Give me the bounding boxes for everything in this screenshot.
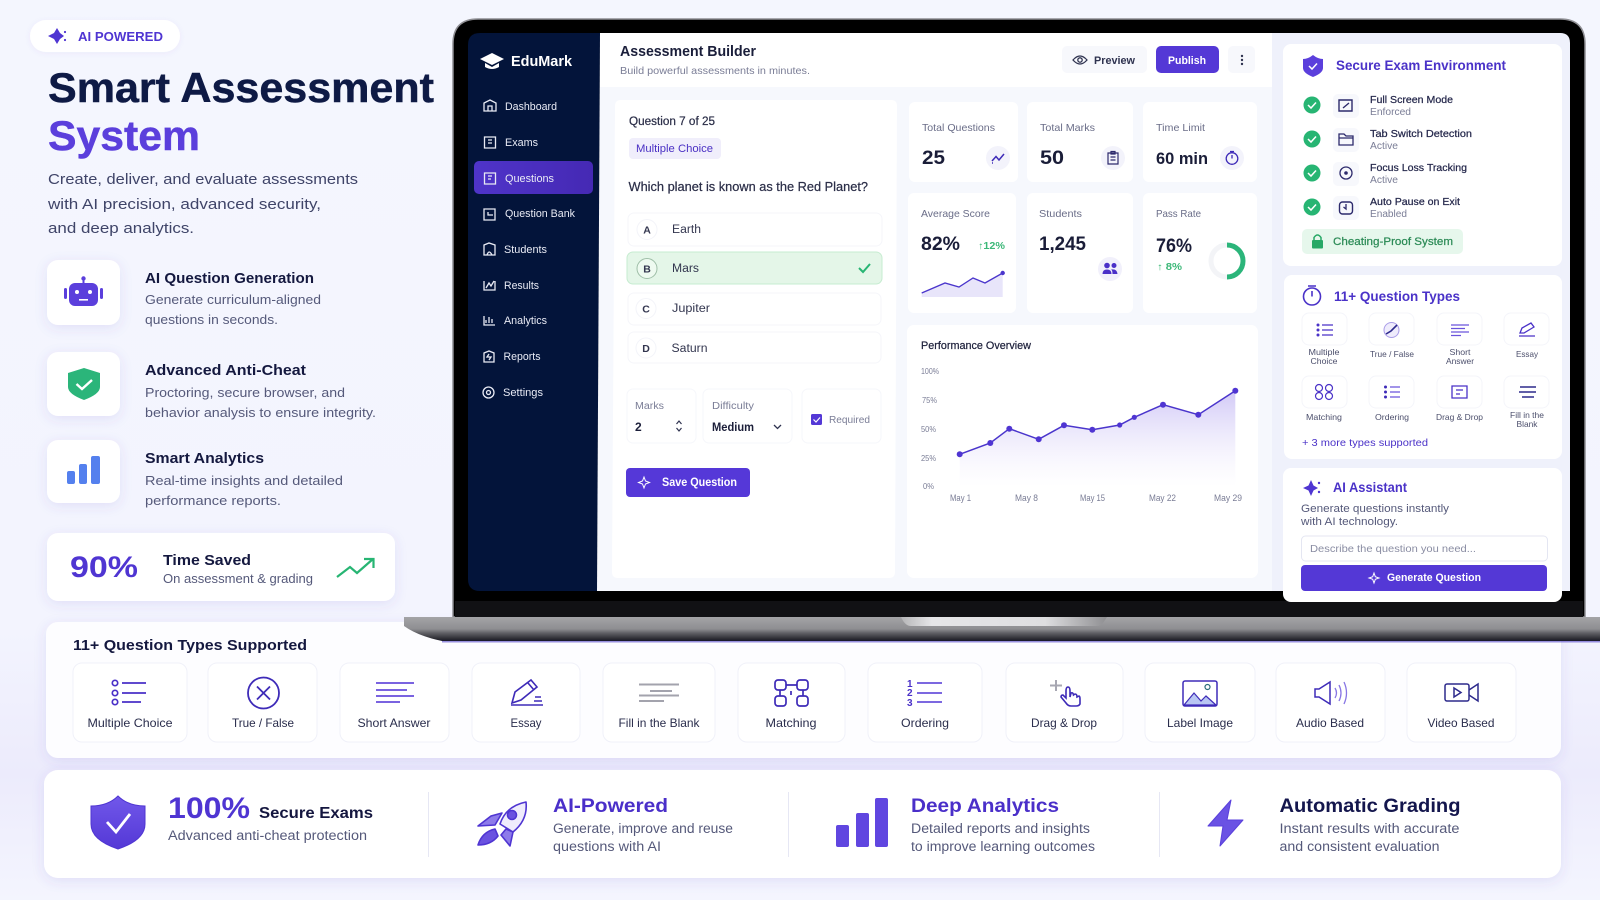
panel: AI assistant: with AI technology. xyxy=(1300,516,1398,528)
feature: AI question generation: questions in seconds. xyxy=(145,312,278,327)
icon: blue bars xyxy=(67,456,100,484)
stat card: total questions: 25 xyxy=(922,148,945,169)
panel: performance overview chart: Performance Overview xyxy=(921,340,1031,352)
stat card: total marks xyxy=(1027,102,1133,182)
tile: label image xyxy=(1145,663,1255,742)
stat: secure exams: Secure Exams xyxy=(259,805,373,822)
nav icon: results xyxy=(484,281,495,290)
nav icon: reports xyxy=(484,351,494,362)
stat card: time saved: Time Saved xyxy=(163,552,251,569)
labels row 1: Choice xyxy=(1310,356,1338,366)
nav icon: students xyxy=(484,243,495,255)
stat card: time limit: Time Limit xyxy=(1156,122,1205,134)
panel: secure exam environment: Secure Exam Environment xyxy=(1336,58,1506,73)
x axis labels: May 22 xyxy=(1149,493,1176,503)
panel: performance overview chart xyxy=(907,325,1258,578)
tag: multiple choice: Multiple Choice xyxy=(636,143,713,155)
feature: advanced anti-cheat: Advanced Anti-Cheat xyxy=(145,362,306,379)
tile: audio based xyxy=(1276,663,1385,742)
row: auto pause on exit: Auto Pause on Exit xyxy=(1370,197,1460,208)
stat: secure exams: Advanced anti-cheat protection xyxy=(168,828,367,843)
intro paragraph: Create, deliver, and evaluate assessments xyxy=(48,171,358,188)
stat card: time saved: 90% xyxy=(70,551,138,584)
stat card: average score xyxy=(908,193,1016,313)
nav: labels: Results xyxy=(504,280,539,292)
field: difficulty xyxy=(703,389,792,443)
tile: matching: Matching xyxy=(766,716,816,730)
panel: question types supported: 11+ Question Types Supported xyxy=(73,637,307,654)
icon: sparkle xyxy=(48,28,66,44)
panel: AI assistant: AI Assistant xyxy=(1333,480,1407,495)
labels row 2: Ordering xyxy=(1375,412,1409,422)
field: marks xyxy=(627,389,696,443)
row: full screen mode: Full Screen Mode xyxy=(1370,95,1453,106)
panel: bottom highlights xyxy=(44,770,1561,878)
option D: D xyxy=(642,343,650,355)
option A: A xyxy=(643,224,651,236)
icon: trend arrow xyxy=(337,559,374,577)
button: preview: Preview xyxy=(1094,55,1135,67)
tile: fill in the blank xyxy=(603,663,715,742)
feature: smart analytics: Real-time insights and detailed xyxy=(145,473,343,488)
labels row 1 xyxy=(1308,347,1539,366)
app: header bar xyxy=(600,33,1272,87)
stat: secure exams xyxy=(168,792,373,843)
panel: question card: Which planet is known as the Red Planet? xyxy=(628,180,868,194)
labels row 1: True / False xyxy=(1370,349,1414,359)
icon: large shield xyxy=(91,796,145,849)
panel: AI assistant xyxy=(1283,468,1562,602)
tile: true false xyxy=(208,663,317,742)
row: focus loss tracking: Active xyxy=(1370,175,1398,186)
tile: drag and drop xyxy=(1006,663,1123,742)
feature: AI question generation: Generate curriculum-aligned xyxy=(145,292,321,307)
stat card: students: 1,245 xyxy=(1039,234,1086,255)
input: question prompt: Describe the question you need... xyxy=(1310,543,1476,555)
x axis labels: May 29 xyxy=(1214,493,1242,503)
tile: ordering: 2 xyxy=(907,688,913,699)
field: difficulty: Difficulty xyxy=(712,401,754,412)
y axis labels: 100% xyxy=(921,367,939,376)
intro paragraph: and deep analytics. xyxy=(48,220,194,237)
labels row 2: Fill in the xyxy=(1510,410,1544,420)
tile: video based xyxy=(1407,663,1516,742)
app: right column background xyxy=(1272,33,1570,591)
nav icon: settings xyxy=(483,387,494,398)
block: automatic grading xyxy=(1280,796,1460,854)
tile: video based: Video Based xyxy=(1428,716,1494,730)
option D xyxy=(628,332,881,363)
stat card: pass rate: Pass Rate xyxy=(1156,208,1201,220)
app: main content background xyxy=(597,33,1272,591)
nav: labels: Exams xyxy=(505,137,538,149)
feature: AI question generation: AI Question Generation xyxy=(145,270,314,287)
feature: smart analytics: Smart Analytics xyxy=(145,450,264,467)
icon: robot xyxy=(64,276,103,306)
stat card: students: Students xyxy=(1039,208,1082,220)
y axis labels: 75% xyxy=(922,396,937,405)
option C: C xyxy=(642,304,650,316)
nav icon: questions xyxy=(484,173,496,184)
tile: audio based: Audio Based xyxy=(1296,716,1364,730)
stat: secure exams: 100% xyxy=(168,792,250,825)
block: AI-powered: AI-Powered xyxy=(553,796,668,817)
labels row 2: Matching xyxy=(1306,412,1342,422)
icon: lightning bolt xyxy=(1208,800,1243,846)
area and line xyxy=(957,388,1238,487)
row: tab switch detection xyxy=(1304,128,1472,152)
stat card: total marks: Total Marks xyxy=(1040,122,1095,134)
feature: advanced anti-cheat: Proctoring, secure browser, and xyxy=(145,385,345,400)
option A xyxy=(628,213,882,246)
button: save question xyxy=(626,468,750,497)
button: publish: Publish xyxy=(1168,55,1206,67)
badge: cheating-proof system xyxy=(1302,229,1463,254)
badge: AI powered: AI POWERED xyxy=(78,29,163,44)
option B correct xyxy=(627,252,882,284)
nav: labels: Analytics xyxy=(504,315,547,327)
tile: short answer xyxy=(340,663,449,742)
button: more xyxy=(1228,46,1255,73)
stat card: time saved: On assessment & grading xyxy=(163,571,313,586)
nav icon: analytics xyxy=(484,316,495,325)
field: required: Required xyxy=(829,415,870,426)
nav: labels: Question Bank xyxy=(505,208,575,220)
stat card: total questions xyxy=(909,102,1018,182)
tile: multiple choice: Multiple Choice xyxy=(88,716,173,730)
block: deep analytics: Detailed reports and insights xyxy=(911,821,1090,836)
button: generate question xyxy=(1301,565,1547,591)
nav: labels: Questions xyxy=(505,173,554,185)
stat card: time limit: 60 min xyxy=(1156,149,1208,168)
nav icon: question bank xyxy=(484,209,495,220)
laptop base xyxy=(404,617,1600,641)
field: difficulty: Medium xyxy=(712,420,754,434)
option D: Saturn xyxy=(672,343,708,355)
field: marks: 2 xyxy=(635,420,642,434)
row: full screen mode: Enforced xyxy=(1370,107,1411,118)
tile: short answer: Short Answer xyxy=(358,716,430,730)
labels row 2: Drag & Drop xyxy=(1436,412,1483,422)
tile: drag and drop: Drag & Drop xyxy=(1031,716,1097,730)
row: focus loss tracking: Focus Loss Tracking xyxy=(1370,163,1467,174)
button: generate question: Generate Question xyxy=(1387,572,1481,584)
donut gauge xyxy=(1211,245,1243,277)
panel: question card xyxy=(612,100,897,578)
stat card: total marks: 50 xyxy=(1040,148,1064,169)
tiles row 1 xyxy=(1302,313,1549,345)
icon: rocket xyxy=(478,802,526,846)
row: tab switch detection: Tab Switch Detection xyxy=(1370,129,1472,140)
stat card: pass rate: 76% xyxy=(1156,236,1192,257)
row: auto pause on exit: Enabled xyxy=(1370,209,1407,220)
panel: 11+ question types xyxy=(1284,275,1562,459)
x axis labels xyxy=(950,493,1242,503)
nav: labels: Students xyxy=(504,244,547,256)
feature: advanced anti-cheat: behavior analysis to ensure integrity. xyxy=(145,405,376,420)
stat card: time saved xyxy=(47,533,395,601)
labels row 1: Short xyxy=(1450,347,1471,357)
stat card: students xyxy=(1027,193,1133,313)
block: deep analytics: to improve learning outcomes xyxy=(911,839,1095,854)
labels row 2: Blank xyxy=(1516,419,1538,429)
labels row 2 xyxy=(1306,410,1544,429)
y axis labels: 50% xyxy=(921,425,936,434)
labels row 1: Essay xyxy=(1516,349,1539,359)
button: publish xyxy=(1156,46,1219,73)
laptop mockup xyxy=(404,19,1600,642)
block: deep analytics xyxy=(911,796,1095,854)
feature: smart analytics xyxy=(47,440,343,508)
icon: graduation cap xyxy=(480,53,504,69)
feature: AI question generation xyxy=(47,260,321,327)
feature: advanced anti-cheat xyxy=(47,352,376,420)
tile: true false: True / False xyxy=(232,716,294,730)
tiles row 2 xyxy=(1302,376,1549,408)
tag: multiple choice xyxy=(629,138,721,159)
tile: ordering: 3 xyxy=(907,698,913,709)
icon: clock xyxy=(1304,286,1320,305)
input: question prompt xyxy=(1302,536,1548,561)
block: deep analytics: Deep Analytics xyxy=(911,796,1059,817)
stat card: total questions: Total Questions xyxy=(922,122,995,134)
field: marks: Marks xyxy=(635,401,664,412)
nav: labels: Settings xyxy=(503,387,543,399)
block: automatic grading: Automatic Grading xyxy=(1280,796,1460,817)
tile: essay xyxy=(472,663,580,742)
sparkline xyxy=(922,271,1005,297)
nav: active highlight xyxy=(474,161,593,194)
stat card: average score: Average Score xyxy=(921,208,990,220)
icon: bars xyxy=(836,798,888,847)
tile: matching xyxy=(738,663,845,742)
app: header bar: Build powerful assessments in minutes. xyxy=(620,65,810,77)
intro paragraph xyxy=(47,171,358,237)
tile: ordering: Ordering xyxy=(901,716,949,730)
block: AI-powered: Generate, improve and reuse xyxy=(553,821,733,836)
nav: labels: Dashboard xyxy=(505,101,557,113)
tile: ordering xyxy=(868,663,982,742)
intro paragraph: with AI precision, advanced security, xyxy=(47,196,321,213)
option B correct: B xyxy=(643,264,651,276)
tile: label image: Label Image xyxy=(1167,716,1233,730)
x axis labels: May 1 xyxy=(950,493,971,503)
title: System xyxy=(48,112,200,159)
button: preview xyxy=(1062,46,1147,73)
laptop notch xyxy=(901,617,1107,626)
button: save question: Save Question xyxy=(662,477,737,489)
y axis labels xyxy=(921,367,939,491)
block: AI-powered xyxy=(553,796,733,854)
labels row 1: Multiple xyxy=(1308,347,1340,357)
panel: question card: Question 7 of 25 xyxy=(629,116,715,128)
stat card: time limit xyxy=(1143,102,1257,182)
tile: essay: Essay xyxy=(510,716,542,730)
badge: cheating-proof system: Cheating-Proof System xyxy=(1333,236,1453,248)
block: AI-powered: questions with AI xyxy=(553,839,661,854)
stat card: average score: 82% xyxy=(921,234,960,255)
panel: 11+ question types: 11+ Question Types xyxy=(1334,289,1460,304)
feature: smart analytics: performance reports. xyxy=(145,493,281,508)
app: sidebar xyxy=(468,33,600,591)
panel: secure exam environment xyxy=(1283,44,1562,266)
option C: Jupiter xyxy=(672,303,710,315)
nav: labels: Reports xyxy=(504,351,541,363)
y axis labels: 25% xyxy=(921,454,936,463)
app: sidebar: EduMark xyxy=(511,53,573,70)
stat card: average score: ↑12% xyxy=(978,241,1005,252)
panel: 11+ question types: + 3 more types supported xyxy=(1302,437,1428,449)
tile: fill in the blank: Fill in the Blank xyxy=(618,716,700,730)
panel: AI assistant: Generate questions instantly xyxy=(1301,503,1450,515)
laptop bezel xyxy=(453,19,1585,617)
option A: Earth xyxy=(672,224,701,236)
nav icon: exams xyxy=(484,137,496,148)
icon: green shield xyxy=(68,368,100,400)
row: auto pause on exit xyxy=(1304,196,1460,220)
tile: ordering: 1 xyxy=(907,679,913,690)
badge: AI powered xyxy=(30,20,180,52)
x axis labels: May 15 xyxy=(1080,493,1105,503)
block: automatic grading: Instant results with accurate xyxy=(1280,821,1460,836)
title xyxy=(48,64,434,159)
title: Smart Assessment xyxy=(48,64,434,111)
stat card: pass rate: ↑ 8% xyxy=(1157,262,1182,273)
field: required xyxy=(802,389,881,443)
labels row 1: Answer xyxy=(1446,356,1474,366)
stat card: pass rate xyxy=(1143,193,1257,313)
block: automatic grading: and consistent evaluation xyxy=(1280,839,1440,854)
option B correct: Mars xyxy=(672,263,699,275)
row: tab switch detection: Active xyxy=(1370,141,1398,152)
y axis labels: 0% xyxy=(923,482,934,491)
x axis labels: May 8 xyxy=(1015,493,1038,503)
icon: purple shield xyxy=(1303,55,1323,77)
tile: multiple choice xyxy=(73,663,187,742)
row: full screen mode xyxy=(1304,94,1453,118)
nav icon: dashboard xyxy=(484,100,496,111)
row: focus loss tracking xyxy=(1304,162,1467,186)
icon: sparkle xyxy=(1303,480,1320,496)
panel: question types supported xyxy=(46,622,1561,758)
nav: labels xyxy=(503,101,575,399)
option C xyxy=(628,293,881,325)
app: header bar: Assessment Builder xyxy=(620,43,756,60)
